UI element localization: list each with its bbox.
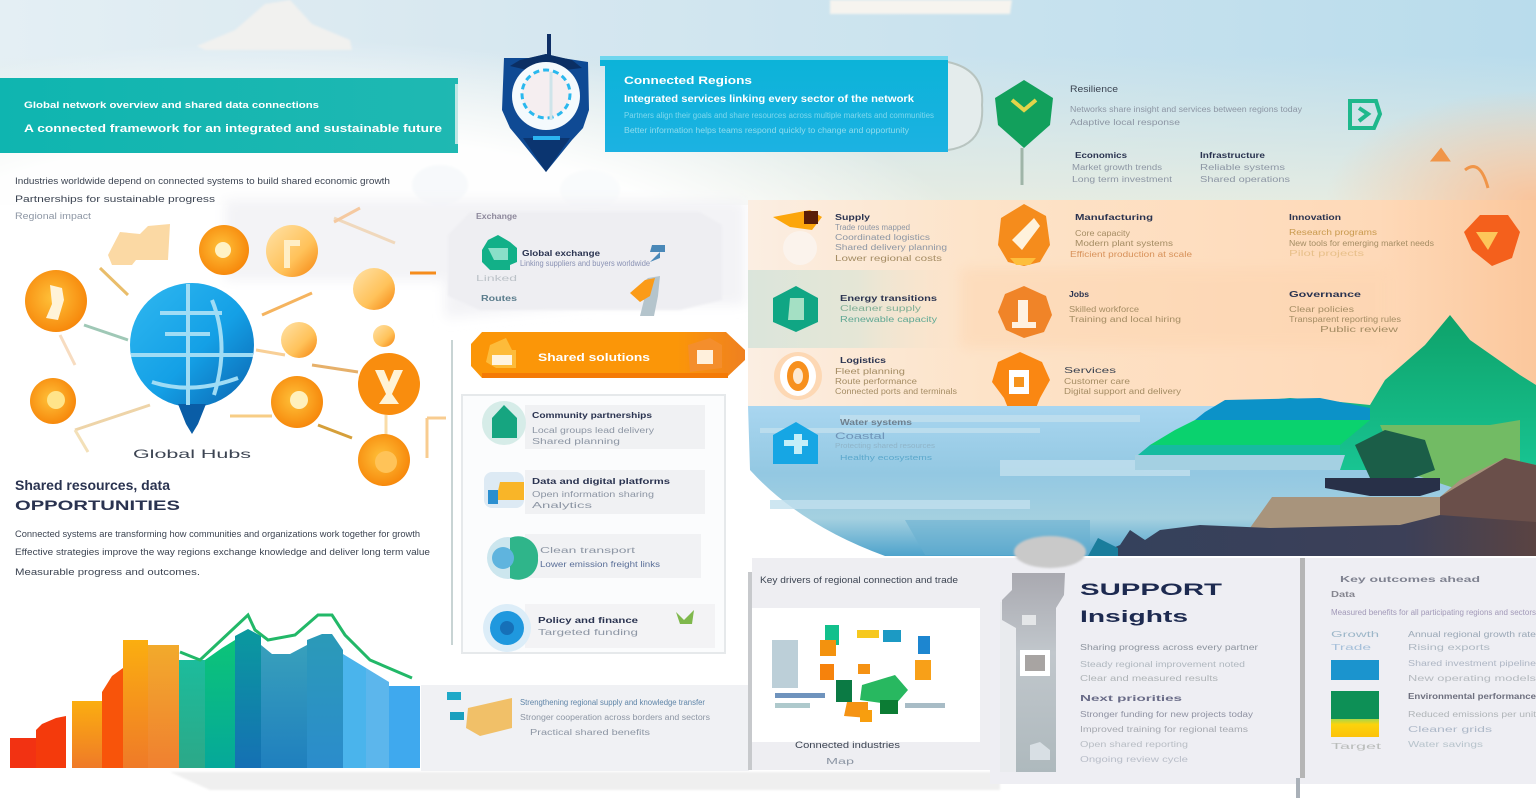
- list item 3: Clean transport: [540, 546, 636, 555]
- row 1 text: Supply: [835, 213, 871, 222]
- banner text: Connected Regions: [624, 75, 752, 87]
- summary text: Stronger funding for new projects today: [1080, 710, 1253, 719]
- row 1 middle text: Modern plant systems: [1075, 239, 1173, 248]
- icon: puzzle cluster: [108, 224, 170, 265]
- intro text: Regional impact: [15, 211, 92, 221]
- panel: center top card: [448, 212, 722, 316]
- network connector lines: [60, 208, 446, 458]
- clouds: [197, 0, 1012, 210]
- panel: center top card: Linked: [476, 274, 517, 283]
- panel: legend card: Water savings: [1408, 740, 1483, 749]
- panel: peach band: [748, 200, 1536, 406]
- paragraph: Effective strategies improve the way regions exchange knowledge and deliver long term value: [15, 547, 430, 557]
- row 1 right text: New tools for emerging market needs: [1289, 239, 1434, 248]
- row 1 text: Shared delivery planning: [835, 243, 947, 252]
- icon: gold box: [447, 692, 512, 736]
- mountain: [1135, 315, 1536, 470]
- row 2 middle text: [1069, 290, 1181, 324]
- summary title: SUPPORT: [1080, 580, 1223, 599]
- banner text: Integrated services linking every sector of the network: [624, 94, 914, 105]
- icon: orange clock: [998, 286, 1052, 338]
- panel: legend card: Rising exports: [1408, 643, 1490, 652]
- row 1 text: Coordinated logistics: [835, 233, 930, 242]
- summary text: Ongoing review cycle: [1080, 755, 1189, 764]
- panel: network card: [752, 558, 990, 770]
- panel: legend card: Target: [1331, 742, 1383, 751]
- summary text: Open shared reporting: [1080, 740, 1188, 749]
- gray boulder: [1014, 536, 1086, 568]
- row 4 text: Protecting shared resources: [835, 443, 936, 450]
- panel: legend card: Annual regional growth rate: [1408, 630, 1536, 639]
- row 2 right text: Transparent reporting rules: [1289, 315, 1401, 324]
- upper right text block: Long term investment: [1072, 175, 1173, 184]
- panel: legend card: Trade: [1331, 643, 1372, 652]
- title text: [24, 100, 442, 135]
- legend swatch blue: [1331, 660, 1379, 680]
- row 1 middle text: [1070, 213, 1193, 259]
- row 2 right text: Governance: [1289, 290, 1362, 299]
- rocks: [1230, 458, 1536, 556]
- row 2 right text: Clear policies: [1289, 305, 1354, 314]
- list item 3: Lower emission freight links: [540, 560, 660, 569]
- subheading: Shared resources, data: [15, 477, 170, 493]
- panel: legend card: Reduced emissions per unit: [1408, 710, 1536, 719]
- icon: orange gem: [1464, 215, 1520, 266]
- panel: legend card: Growth: [1331, 630, 1379, 639]
- intro text: Partnerships for sustainable progress: [15, 194, 216, 204]
- row 2 text: Energy transitions: [840, 294, 938, 303]
- icon: orange bird: [773, 210, 822, 265]
- paragraph: [15, 529, 430, 577]
- summary text: Clear and measured results: [1080, 674, 1218, 683]
- panel: center top card: Routes: [481, 294, 518, 303]
- row 4 text: Water systems: [840, 418, 913, 427]
- row 3 text: Logistics: [840, 356, 887, 365]
- bar chart: [10, 615, 420, 768]
- panel: center top card: Linking suppliers and buyers worldwide: [520, 259, 651, 268]
- summary text: Steady regional improvement noted: [1080, 660, 1245, 669]
- icon: green leaf: [773, 286, 818, 332]
- upper right text block: Resilience: [1070, 84, 1118, 94]
- row 1 right text: Innovation: [1289, 213, 1341, 222]
- upper right text block: Market growth trends: [1072, 163, 1162, 172]
- panel: legend card: Data: [1331, 590, 1356, 599]
- icon: green badge: [1350, 101, 1380, 128]
- list item 4: Targeted funding: [538, 628, 638, 637]
- upper right text block: Shared operations: [1200, 175, 1290, 184]
- banner text: [624, 75, 934, 135]
- panel: network card: Key drivers of regional connection and trade: [760, 575, 958, 585]
- panel: bottom left card: Stronger cooperation across borders and sectors: [520, 713, 710, 722]
- upper right text block: Adaptive local response: [1070, 118, 1181, 127]
- row 1 middle text: Manufacturing: [1075, 213, 1153, 222]
- row 2 middle text: Training and local hiring: [1069, 315, 1181, 324]
- summary text: Next priorities: [1080, 694, 1183, 703]
- gray strip: [1000, 573, 1065, 772]
- title text: Global network overview and shared data connections: [24, 100, 319, 110]
- intro text: [15, 176, 390, 221]
- list item 2: Data and digital platforms: [532, 477, 671, 486]
- row 4 text: [835, 418, 936, 462]
- banner text: Better information helps teams respond quickly to change and opportunity: [624, 126, 909, 135]
- row 1 right text: Research programs: [1289, 228, 1377, 237]
- icon: orange ring: [774, 352, 822, 400]
- row 2 text: Renewable capacity: [840, 315, 937, 324]
- panel: orange pill: Shared solutions: [538, 352, 650, 364]
- upper right text block: Networks share insight and services between regions today: [1070, 105, 1302, 114]
- upper right text block: Reliable systems: [1200, 163, 1285, 172]
- row 3 text: [835, 356, 957, 396]
- icon: small orange arrows: [1433, 150, 1488, 188]
- globe label: Global Hubs: [133, 447, 251, 461]
- panel: center list: [452, 340, 725, 653]
- panel: network card: Map: [826, 757, 855, 766]
- panel: legend card: Key outcomes ahead: [1340, 575, 1480, 584]
- row 1 middle text: Core capacity: [1075, 229, 1130, 238]
- row 1 right text: Pilot projects: [1289, 249, 1364, 258]
- row 1 text: Lower regional costs: [835, 254, 942, 263]
- panel: center top card: Global exchange: [522, 249, 601, 258]
- row 3 middle text: [1064, 366, 1181, 396]
- row 3 middle text: Services: [1064, 366, 1116, 375]
- row 2 right text: Public review: [1320, 325, 1398, 334]
- subheading: OPPORTUNITIES: [15, 497, 180, 513]
- title text: A connected framework for an integrated and sustainable future: [24, 123, 442, 135]
- legend swatch green yellow: [1331, 691, 1379, 737]
- icon: blue star badge: [773, 422, 818, 464]
- panel: orange pill: [471, 332, 745, 378]
- panel: network card: Connected industries: [795, 740, 901, 750]
- summary title: Insights: [1080, 607, 1188, 626]
- row 1 right text: [1289, 213, 1434, 258]
- list item 2: [484, 472, 671, 510]
- icon: navy shield pin: [502, 34, 589, 172]
- panel: legend card: Shared investment pipeline: [1408, 659, 1536, 668]
- intro text: Industries worldwide depend on connected systems to build shared economic growth: [15, 176, 390, 186]
- list item 2: Open information sharing: [532, 490, 654, 499]
- list item 2: Analytics: [532, 501, 592, 510]
- list item 4: [483, 604, 694, 652]
- summary text: Sharing progress across every partner: [1080, 643, 1258, 652]
- paragraph: Connected systems are transforming how communities and organizations work together for growth: [15, 529, 420, 539]
- icon: orange coin tool: [998, 204, 1050, 266]
- panel: bottom left card: Strengthening regional supply and knowledge transfer: [520, 698, 705, 707]
- row 3 text: Route performance: [835, 377, 918, 386]
- panel: legend card: Environmental performance: [1408, 692, 1536, 701]
- row 3 text: Connected ports and terminals: [835, 387, 957, 396]
- upper right text block: Infrastructure: [1200, 151, 1266, 160]
- row 2 text: [840, 294, 938, 324]
- list item 1: [482, 401, 654, 446]
- panel: blue banner: [600, 56, 982, 152]
- summary title: [1080, 580, 1223, 626]
- icon: green shield: [995, 80, 1053, 185]
- row 2 middle text: Jobs: [1069, 290, 1090, 299]
- upper right text block: Economics: [1075, 151, 1128, 160]
- icon: orange coins: [25, 225, 420, 486]
- panel: legend card: Cleaner grids: [1408, 725, 1492, 734]
- list item 4: Policy and finance: [538, 616, 639, 625]
- row 3 middle text: Digital support and delivery: [1064, 387, 1181, 396]
- chart base shadow: [170, 772, 1000, 790]
- row 4 text: Healthy ecosystems: [840, 455, 933, 462]
- row 1 middle text: Efficient production at scale: [1070, 250, 1193, 259]
- panel: sea landscape: [748, 315, 1536, 556]
- banner text: Partners align their goals and share resources across multiple markets and communities: [624, 111, 934, 120]
- list item 3: [487, 536, 660, 580]
- row 1 text: [835, 213, 947, 263]
- panel: center top card: Exchange: [476, 212, 518, 221]
- panel: legend card: [1296, 558, 1536, 798]
- icon: orange target: [992, 352, 1050, 408]
- panel: bottom left card: Practical shared benefits: [530, 728, 650, 737]
- icon: green cycle: [482, 235, 517, 270]
- row 4 text: Coastal: [835, 431, 885, 441]
- paragraph: Measurable progress and outcomes.: [15, 567, 200, 577]
- row 2 text: Cleaner supply: [840, 304, 921, 313]
- row 3 text: Fleet planning: [835, 367, 905, 376]
- row 3 middle text: Customer care: [1064, 377, 1131, 386]
- panel: bottom left card: [421, 572, 752, 771]
- subheading: [15, 477, 180, 513]
- pale backdrop behind network: [225, 200, 745, 318]
- icon: globe pin: [130, 283, 254, 434]
- circular network diagram: [772, 625, 945, 722]
- panel: teal title banner: [0, 78, 458, 153]
- panel: legend card: New operating models: [1408, 674, 1536, 683]
- list item 1: Community partnerships: [532, 411, 653, 420]
- row 2 right text: [1289, 290, 1401, 334]
- panel: legend card: Measured benefits for all participating regions and sectors: [1331, 608, 1536, 617]
- summary text: [1080, 643, 1258, 764]
- panel: summary card: [990, 536, 1304, 784]
- list item 1: Local groups lead delivery: [532, 426, 654, 435]
- row 2 middle text: Skilled workforce: [1069, 305, 1140, 314]
- list item 1: Shared planning: [532, 437, 620, 446]
- row 1 text: Trade routes mapped: [835, 223, 910, 232]
- summary text: Improved training for regional teams: [1080, 725, 1248, 734]
- upper right text block: [1070, 84, 1302, 184]
